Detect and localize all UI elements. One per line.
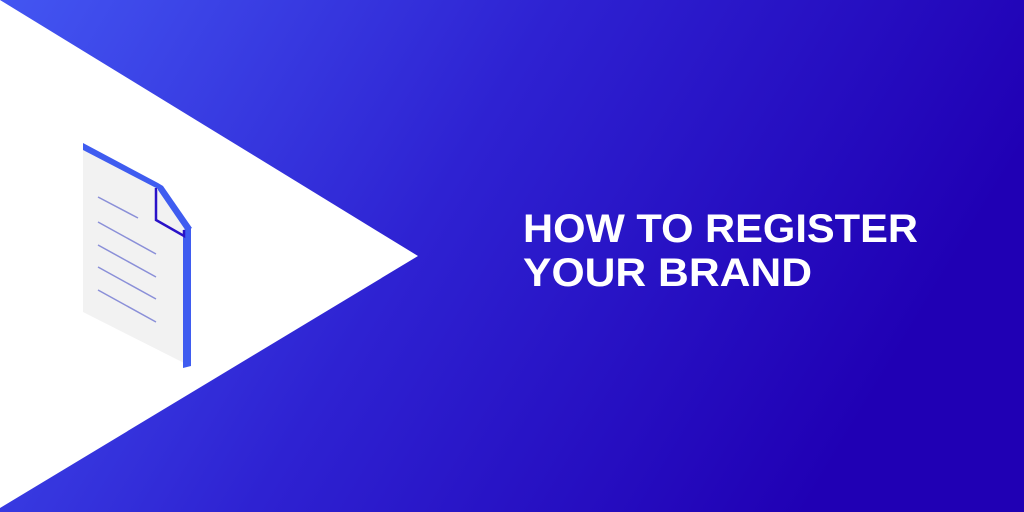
title: HOW TO REGISTER	[523, 207, 918, 251]
white triangle	[0, 0, 418, 508]
icon: document	[83, 143, 192, 368]
title: YOUR BRAND	[523, 251, 812, 295]
title	[523, 207, 918, 295]
